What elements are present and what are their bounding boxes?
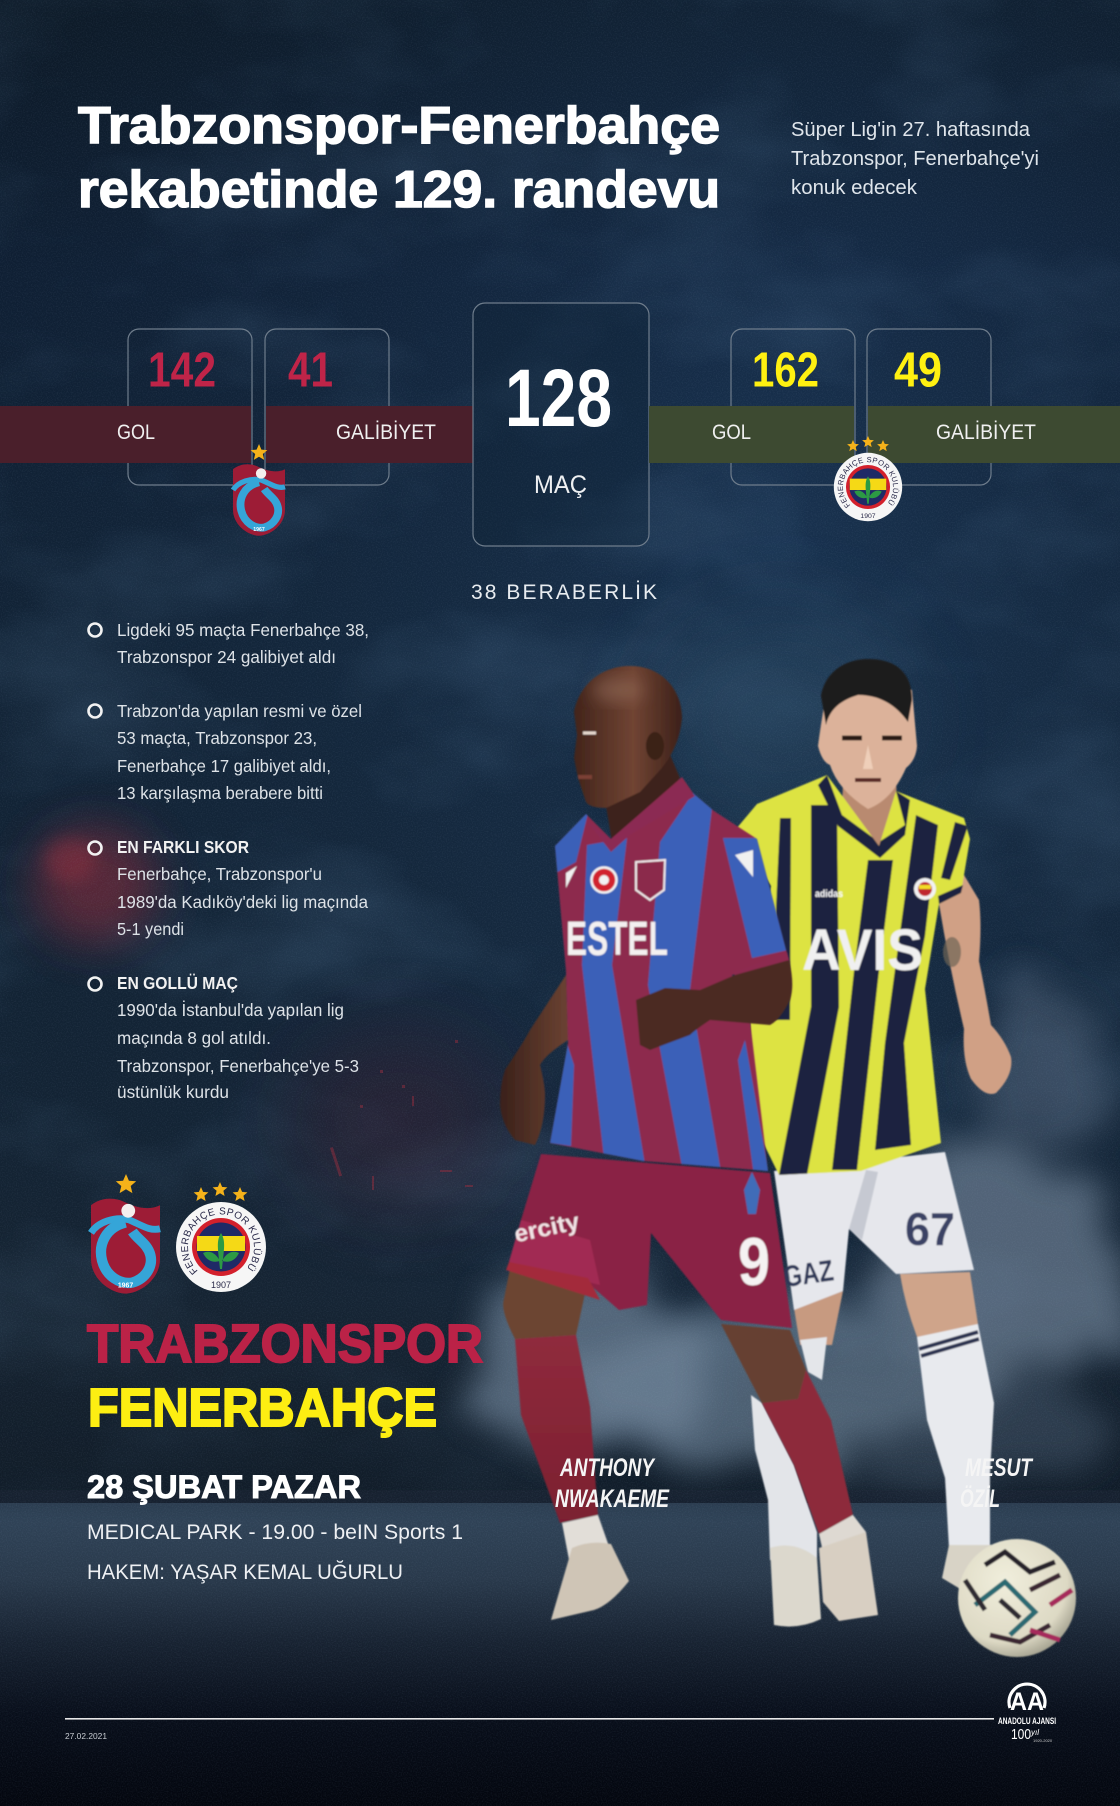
Özil shorts: 67 [905, 1203, 955, 1255]
fact: highest scoring match: Trabzonspor, Fenerbahçe'ye 5-3 [117, 1056, 359, 1076]
fact: highest scoring match: maçında 8 gol atıldı. [117, 1028, 271, 1048]
icon: Fenerbahçe small crest: 1907 [860, 513, 876, 520]
player name: Mesut Özil: MESUT [965, 1454, 1034, 1482]
fact: highest scoring match: üstünlük kurdu [117, 1082, 229, 1102]
panel: Trabzonspor statistics [0, 329, 473, 485]
fact: biggest score: 5-1 yendi [117, 919, 184, 939]
subtitle: konuk edecek [791, 177, 918, 199]
fact: matches in Trabzon [88, 701, 362, 803]
panel: total matches: MAÇ [534, 471, 587, 499]
player name: Mesut Özil: ÖZİL [960, 1484, 1000, 1513]
Trabzonspor wins: 41 [288, 344, 333, 398]
Nwakaeme legs [503, 1258, 878, 1621]
Fenerbahçe wins: GALİBİYET [936, 421, 1036, 444]
player: Anthony Nwakaeme [500, 666, 878, 1621]
player name: Anthony Nwakaeme: NWAKAEME [555, 1485, 670, 1513]
match details: MEDICAL PARK - 19.00 - beIN Sports 1 [87, 1521, 463, 1544]
draws label: 38 BERABERLİK [471, 581, 657, 604]
Fenerbahçe goals [712, 344, 819, 444]
icon: Fenerbahçe large crest: FENERBAHÇE SPOR KULÜBÜ [181, 1207, 262, 1275]
match heading: teams [87, 1314, 483, 1438]
Özil shorts [774, 1152, 974, 1310]
Trabzonspor wins: GALİBİYET [336, 421, 436, 444]
Nwakaeme jersey [550, 777, 790, 1180]
player name: Anthony Nwakaeme: ANTHONY [559, 1454, 656, 1482]
fact: highest scoring match [88, 973, 359, 1102]
Özil neck and head [818, 659, 917, 846]
title: rekabetinde 129. randevu [78, 161, 720, 219]
Özil arms [750, 875, 1011, 1104]
panel: total matches: 128 [505, 353, 612, 444]
panel: total matches [473, 303, 649, 546]
icon: Trabzonspor large crest: 1967 [118, 1282, 133, 1289]
Özil shorts: GAZ [782, 1254, 836, 1294]
Trabzonspor wins [288, 344, 436, 444]
Nwakaeme shorts: ercity [512, 1208, 582, 1248]
icon: Fenerbahçe small crest [834, 436, 902, 522]
match heading: teams: TRABZONSPOR [87, 1314, 483, 1374]
Özil jersey sponsor: AVIS [802, 918, 923, 983]
Özil legs [751, 1272, 994, 1627]
subtitle [791, 119, 1039, 199]
Trabzonspor goals: GOL [117, 421, 155, 444]
player name: Anthony Nwakaeme [555, 1454, 670, 1513]
facts list [88, 620, 369, 1102]
icon: Trabzonspor large crest [91, 1174, 160, 1294]
Fenerbahçe goals: 162 [752, 344, 819, 398]
fact: biggest score: Fenerbahçe, Trabzonspor'u [117, 864, 322, 884]
title: Trabzonspor-Fenerbahçe [78, 97, 720, 155]
fact: matches in Trabzon: 13 karşılaşma berabere bitti [117, 783, 323, 803]
icon: Fenerbahçe small crest: FENERBAHÇE SPOR KULÜBÜ [838, 456, 900, 508]
player: Mesut Özil [736, 659, 1011, 1627]
Fenerbahçe wins: 49 [894, 344, 942, 398]
fact: league results [88, 620, 369, 667]
logo: Anadolu Ajansı: yıl [1030, 1728, 1039, 1737]
footer line and date: 27.02.2021 [65, 1731, 107, 1741]
logo: Anadolu Ajansı: 1920-2020 [1033, 1738, 1053, 1743]
icon: Trabzonspor small crest: 1967 [253, 527, 265, 533]
Trabzonspor goals [117, 344, 216, 444]
icon: Fenerbahçe large crest: 1907 [211, 1280, 231, 1290]
Nwakaeme shorts: 9 [738, 1224, 770, 1300]
fact: biggest score [88, 837, 368, 939]
icon: Fenerbahçe large crest [176, 1182, 266, 1292]
fact: matches in Trabzon: Fenerbahçe 17 galibiyet aldı, [117, 756, 331, 776]
icon: Trabzonspor small crest [233, 444, 285, 536]
Nwakaeme jersey sponsor: ESTEL [566, 913, 668, 966]
Özil jersey: adidas [815, 889, 843, 900]
fact: matches in Trabzon: Trabzon'da yapılan resmi ve özel [117, 701, 362, 721]
match details: 28 ŞUBAT PAZAR [87, 1469, 361, 1505]
match heading: teams: FENERBAHÇE [88, 1378, 437, 1438]
logo: Anadolu Ajansı: 100 [1011, 1726, 1031, 1743]
subtitle: Süper Lig'in 27. haftasında [791, 119, 1031, 141]
fact: league results: Trabzonspor 24 galibiyet aldı [117, 647, 336, 667]
football [958, 1539, 1076, 1657]
Trabzonspor goals: 142 [148, 344, 216, 398]
fact: league results: Ligdeki 95 maçta Fenerbahçe 38, [117, 620, 369, 640]
player name: Mesut Özil [960, 1454, 1034, 1513]
Nwakaeme shorts [506, 1154, 792, 1328]
subtitle: Trabzonspor, Fenerbahçe'yi [791, 148, 1039, 170]
fact: highest scoring match: EN GOLLÜ MAÇ [117, 973, 238, 993]
fact: highest scoring match: 1990'da İstanbul'da yapılan lig [117, 1000, 344, 1020]
logo: Anadolu Ajansı: ANADOLU AJANSI [998, 1716, 1056, 1726]
Nwakaeme arms [500, 975, 568, 1145]
title [78, 97, 720, 219]
Fenerbahçe goals: GOL [712, 421, 751, 444]
panel: Fenerbahçe statistics [649, 329, 1120, 485]
Nwakaeme forearm and hand [636, 960, 792, 1050]
fact: matches in Trabzon: 53 maçta, Trabzonspor 23, [117, 728, 317, 748]
fact: biggest score: EN FARKLI SKOR [117, 837, 249, 857]
Nwakaeme neck and head [574, 666, 682, 842]
match details [87, 1469, 463, 1584]
fact: biggest score: 1989'da Kadıköy'deki lig maçında [117, 892, 368, 912]
logo: Anadolu Ajansı: AA [1010, 1688, 1044, 1716]
logo: Anadolu Ajansı [998, 1684, 1056, 1743]
Özil jersey [736, 775, 970, 1175]
match details: HAKEM: YAŞAR KEMAL UĞURLU [87, 1561, 403, 1584]
Fenerbahçe wins [894, 344, 1036, 444]
